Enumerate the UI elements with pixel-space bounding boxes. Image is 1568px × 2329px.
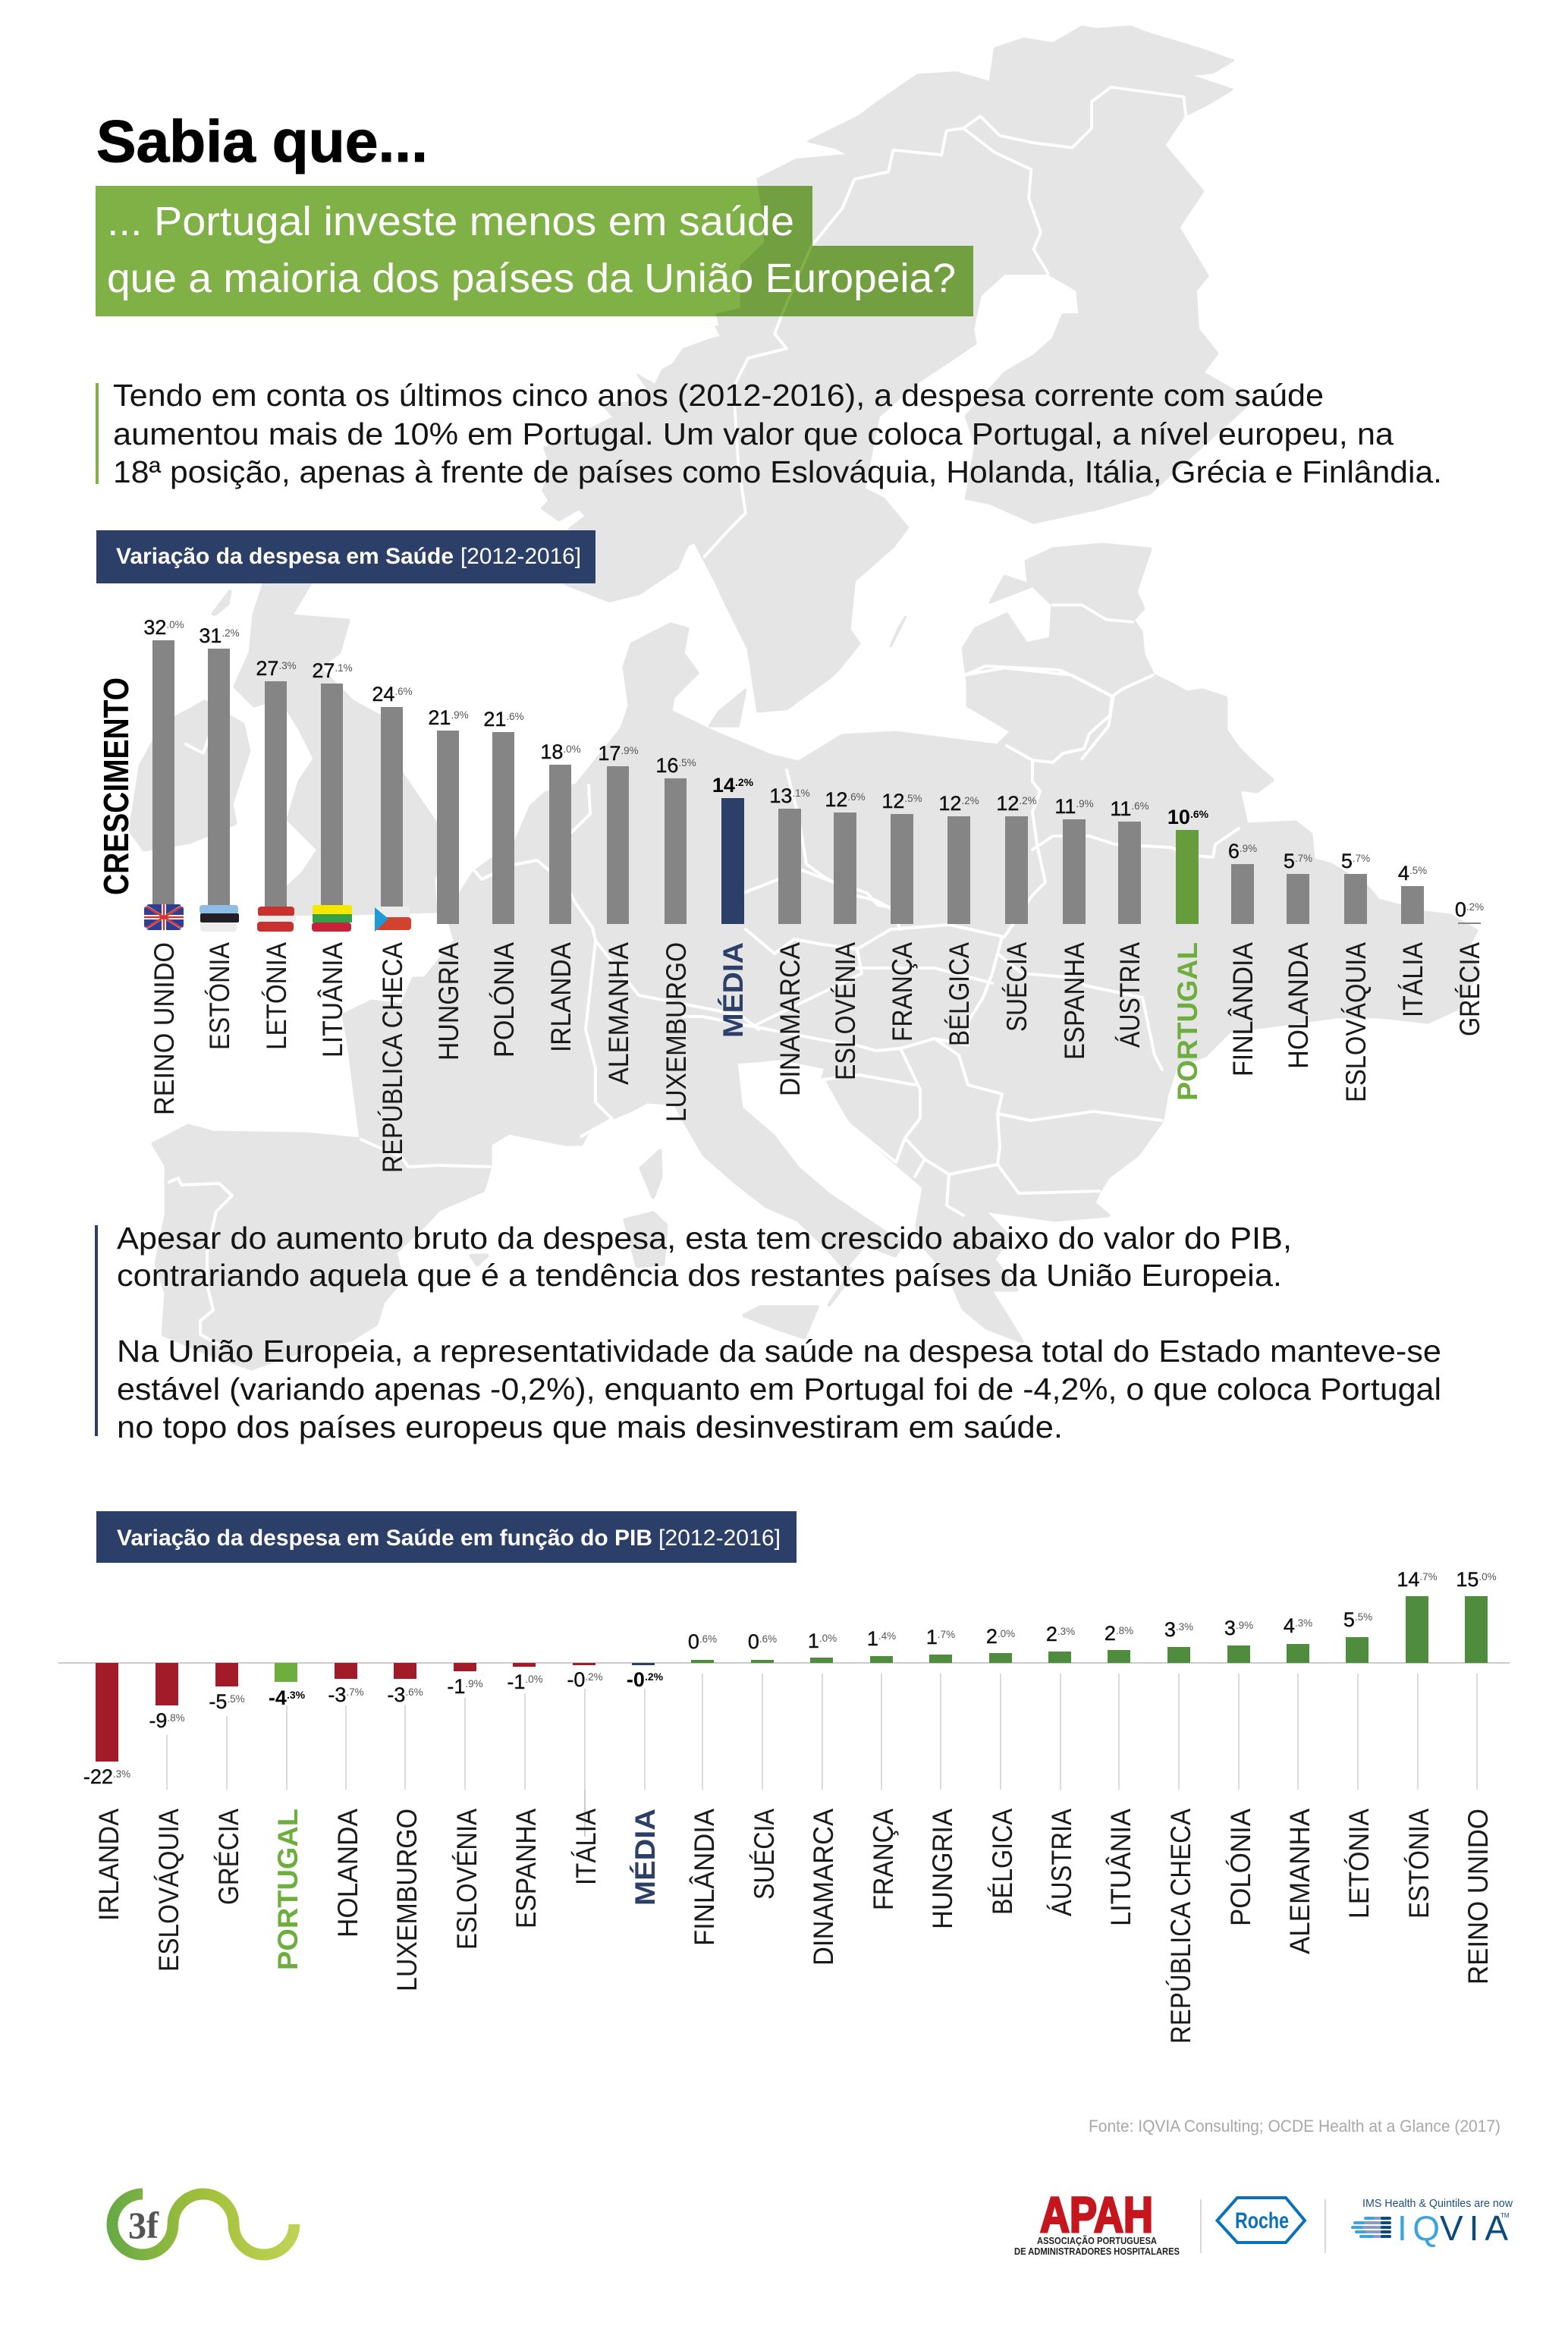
bar: Eslováquia: ESLOVÁQUIA	[1340, 942, 1372, 1102]
bar: Lituânia: .1%	[335, 662, 353, 674]
bar: Bélgica: 12	[938, 792, 961, 815]
intro text block: Tendo em conta os últimos cinco anos (2012-2016), a despesa corrente com saúde	[113, 378, 1324, 413]
bar: Reino Unido: 32	[143, 616, 166, 639]
bar: Espanha: .9%	[1076, 798, 1094, 809]
bar: Polónia	[483, 708, 524, 1058]
bar: França: 12	[881, 790, 904, 812]
logo: IQVIA: IMS Health & Quintiles are now	[1362, 2198, 1513, 2210]
bar: Reino Unido: .0%	[166, 619, 184, 630]
bar: República Checa: REPÚBLICA CHECA	[377, 942, 408, 1173]
bar: República Checa: 3	[1164, 1618, 1176, 1641]
bar: Espanha: ESPANHA	[511, 1809, 542, 1928]
bar: Eslovénia	[447, 1663, 483, 1950]
bar: França	[867, 1627, 899, 1910]
bar: Holanda: HOLANDA	[332, 1809, 363, 1938]
bar: Espanha: .0%	[525, 1674, 543, 1685]
bar: Eslovénia: ESLOVÉNIA	[830, 942, 861, 1080]
bar: Portugal: PORTUGAL	[272, 1809, 303, 1970]
bar: Eslovénia	[825, 788, 866, 1080]
bar: Dinamarca: 13	[769, 784, 792, 807]
flag: Letónia	[257, 907, 296, 932]
bar: Reino Unido: REINO UNIDO	[149, 942, 180, 1115]
bar: Itália: 4	[1398, 862, 1409, 885]
bar chart: variação da despesa	[143, 616, 1485, 1173]
flag: Reino Unido	[144, 904, 184, 930]
bar: República Checa: REPÚBLICA CHECA	[1165, 1809, 1196, 2044]
bar: Suécia: 12	[996, 792, 1019, 815]
bar: Áustria: .6%	[1131, 800, 1149, 812]
bar: Irlanda	[540, 740, 581, 1052]
bar chart: variação em função do PIB	[58, 1568, 1510, 2044]
bar: Itália: ITÁLIA	[1397, 942, 1428, 1017]
bar: Eslováquia: -9	[149, 1709, 167, 1732]
bar: Espanha: ESPANHA	[1059, 942, 1090, 1060]
bar: Espanha	[1054, 795, 1094, 1060]
bar: Dinamarca: DINAMARCA	[775, 942, 806, 1096]
logo: IQVIA: IQ	[1397, 2208, 1440, 2248]
bar: Hungria: .9%	[451, 709, 469, 721]
bar: Hungria: 21	[428, 706, 451, 729]
bar: Áustria: .3%	[1057, 1626, 1075, 1637]
bar: Finlândia: FINLÂNDIA	[1227, 942, 1258, 1076]
heading: chart 1: [2012-2016]	[460, 544, 581, 569]
bar: Itália	[1397, 862, 1428, 1017]
bar: Bélgica: 2	[986, 1625, 998, 1648]
text block: PIB commentary: contrariando aquela que é a tendência dos restantes países da União Europeia.	[117, 1258, 1282, 1293]
bar: Luxemburgo: -3	[387, 1683, 405, 1706]
logo: APAH	[1014, 2186, 1180, 2257]
bar: Alemanha: ALEMANHA	[1284, 1809, 1315, 1954]
bar: Polónia: POLÓNIA	[489, 942, 520, 1058]
bar: Suécia: SUÉCIA	[1001, 942, 1032, 1032]
subtitle green banner: que a maioria dos países da União Europeia?	[107, 256, 956, 301]
bar: Polónia	[1224, 1617, 1256, 1926]
bar: França: .4%	[878, 1630, 896, 1642]
bar: França: FRANÇA	[887, 942, 918, 1042]
bar: Eslovénia: .6%	[847, 791, 866, 803]
bar: Finlândia	[1227, 840, 1258, 1076]
bar: Itália: .5%	[1409, 865, 1427, 876]
bar: Reino Unido: .0%	[1478, 1571, 1497, 1583]
bar: Bélgica: .0%	[998, 1628, 1015, 1639]
bar: Média: 14	[712, 774, 735, 797]
bar: Luxemburgo: 16	[655, 754, 678, 777]
bar: França: .5%	[904, 793, 922, 804]
bar: Lituânia: LITUÂNIA	[317, 942, 348, 1058]
logo: 3f	[112, 2194, 294, 2255]
bar: Hungria	[926, 1626, 958, 1929]
bar: Luxemburgo: .5%	[678, 757, 696, 768]
logo: IQVIA: TM	[1500, 2212, 1510, 2219]
bar: Bélgica: BÉLGICA	[944, 942, 975, 1046]
logo: Roche: Roche	[1235, 2208, 1289, 2233]
bar: Hungria	[428, 706, 469, 1061]
bar: Portugal	[1167, 806, 1209, 1101]
bar: Letónia	[1343, 1608, 1375, 1919]
background map of Europe	[130, 27, 1478, 1369]
bar: Letónia: 5	[1343, 1608, 1355, 1631]
bar: Letónia: LETÓNIA	[1343, 1809, 1375, 1919]
bar: Itália: .2%	[585, 1671, 603, 1683]
bar: Espanha: -1	[507, 1671, 525, 1693]
bar: Hungria: .7%	[938, 1629, 955, 1640]
bar: Hungria: HUNGRIA	[433, 942, 464, 1061]
bar: Grécia	[209, 1663, 245, 1905]
bar: França: 1	[867, 1627, 878, 1650]
bar: Irlanda: .3%	[113, 1768, 130, 1780]
bar: Média	[627, 1663, 664, 1906]
bar: Finlândia: 6	[1228, 840, 1240, 863]
bar: Suécia	[996, 792, 1037, 1032]
bar: Eslováquia: .7%	[1353, 853, 1370, 864]
bar: Holanda: .7%	[346, 1686, 364, 1698]
bar: Áustria	[1046, 1623, 1077, 1916]
bar: Reino Unido: 15	[1456, 1568, 1478, 1591]
bar: Letónia: .5%	[1355, 1611, 1372, 1623]
bar: Alemanha: 17	[598, 742, 621, 765]
bar: Áustria: ÁUSTRIA	[1114, 942, 1145, 1048]
bar: Grécia: 0	[1455, 898, 1466, 921]
bar: Suécia: 0	[748, 1630, 759, 1653]
heading: chart 1	[96, 530, 595, 583]
bar: Bélgica: .2%	[961, 795, 979, 806]
bar: Lituânia: 27	[312, 659, 335, 682]
bar: República Checa: 24	[372, 683, 394, 706]
bar: Eslovénia: .9%	[465, 1678, 483, 1689]
bar: Lituânia	[312, 659, 353, 1058]
bar: Holanda: .7%	[1295, 853, 1312, 864]
axis title: crescimento: CRESCIMENTO	[96, 677, 136, 895]
bar: Eslovénia: -1	[447, 1675, 465, 1698]
bar: Dinamarca: .1%	[792, 787, 810, 799]
bar: Áustria: ÁUSTRIA	[1046, 1809, 1077, 1916]
bar: Dinamarca: 1	[808, 1630, 819, 1652]
bar: Hungria: 1	[926, 1626, 938, 1649]
subtitle green banner: ... Portugal investe menos em saúde	[107, 199, 794, 244]
bar: Alemanha: .3%	[1295, 1617, 1312, 1629]
bar: Irlanda: 18	[540, 740, 563, 763]
bar: Luxemburgo: .6%	[405, 1686, 423, 1698]
source note: Fonte: IQVIA Consulting; OCDE Health at a Glance (2017)	[1089, 2117, 1500, 2136]
bar: República Checa: .3%	[1176, 1621, 1193, 1633]
bar: Finlândia: 0	[688, 1630, 699, 1653]
bar: Luxemburgo: LUXEMBURGO	[391, 1809, 423, 1991]
bar: Itália: ITÁLIA	[570, 1809, 602, 1885]
bar: Espanha	[507, 1663, 543, 1928]
bar: Portugal: .3%	[287, 1689, 306, 1701]
bar: Portugal: 10	[1167, 806, 1190, 828]
bar: Alemanha	[1284, 1614, 1315, 1954]
bar: Dinamarca: .0%	[819, 1633, 837, 1644]
bar: Alemanha	[598, 742, 639, 1085]
logo: APAH: DE ADMINISTRADORES HOSPITALARES	[1014, 2246, 1180, 2257]
bar: França	[881, 790, 922, 1042]
bar: Irlanda: IRLANDA	[545, 942, 577, 1052]
bar: Irlanda: -22	[83, 1765, 113, 1788]
bar: Média: .2%	[735, 776, 754, 788]
bar: Portugal	[269, 1663, 306, 1970]
bar: Bélgica: BÉLGICA	[987, 1809, 1018, 1915]
logo: APAH: ASSOCIAÇÃO PORTUGUESA	[1037, 2235, 1158, 2246]
bar: Portugal: -4	[269, 1686, 287, 1709]
bar: Grécia: .2%	[1466, 901, 1484, 913]
bar: Grécia: GRÉCIA	[1454, 942, 1485, 1036]
bar: Holanda: HOLANDA	[1283, 942, 1314, 1069]
heading: chart 2: [2012-2016]	[658, 1526, 781, 1551]
flag: República Checa	[375, 907, 411, 932]
bar: Eslovénia: ESLOVÉNIA	[451, 1809, 482, 1950]
bar: Estónia: .2%	[222, 627, 240, 639]
bar: Reino Unido	[1456, 1568, 1497, 1985]
bar: Portugal: .6%	[1190, 808, 1209, 820]
bar: Eslováquia: ESLOVÁQUIA	[153, 1809, 184, 1972]
bar: Média: MÉDIA	[718, 942, 749, 1038]
bar: República Checa	[372, 683, 413, 1173]
bar: França: FRANÇA	[868, 1809, 899, 1910]
bar: Holanda	[328, 1663, 364, 1938]
bar: Portugal: PORTUGAL	[1172, 942, 1203, 1101]
intro text block: aumentou mais de 10% em Portugal. Um valor que coloca Portugal, a nível europeu, na	[113, 416, 1394, 451]
bar: Letónia: .3%	[278, 660, 297, 671]
bar: Holanda	[1283, 850, 1314, 1069]
bar: Estónia	[199, 624, 240, 1050]
bar: Holanda: -3	[328, 1683, 346, 1706]
intro text block: 18ª posição, apenas à frente de países como Eslováquia, Holanda, Itália, Grécia e Finlândia.	[113, 454, 1442, 489]
bar: Polónia: .6%	[506, 711, 524, 722]
bar: Média: .2%	[645, 1671, 664, 1683]
flag: Estónia	[200, 905, 239, 932]
bar: Hungria: HUNGRIA	[927, 1809, 958, 1929]
bar: Suécia	[748, 1630, 780, 1900]
bar: Áustria: 2	[1046, 1623, 1057, 1645]
bar: Dinamarca: DINAMARCA	[808, 1809, 839, 1966]
bar: Estónia	[1397, 1568, 1438, 1919]
bar: Finlândia: .6%	[699, 1633, 717, 1645]
intro text block	[96, 378, 1442, 489]
bar: Polónia: 21	[483, 708, 506, 731]
bar: Itália	[567, 1663, 603, 1885]
subtitle green banner	[96, 186, 973, 316]
bar: Grécia: GRÉCIA	[213, 1809, 244, 1905]
bar: Polónia: POLÓNIA	[1225, 1809, 1256, 1926]
bar: Reino Unido: REINO UNIDO	[1463, 1809, 1494, 1985]
bar: Estónia: 31	[199, 624, 222, 647]
flag: Lituânia	[312, 905, 352, 932]
bar: Luxemburgo	[655, 754, 696, 1122]
bar: Estónia: ESTÓNIA	[204, 942, 235, 1050]
heading: chart 1: Variação da despesa em Saúde	[116, 544, 454, 569]
bar: Grécia: .5%	[227, 1693, 245, 1705]
bar: Irlanda	[83, 1663, 130, 1921]
bar: Holanda: 5	[1284, 850, 1295, 872]
bar: Média	[712, 774, 754, 1038]
bar: Média: MÉDIA	[630, 1809, 661, 1906]
heading: chart 2	[96, 1511, 797, 1563]
bar: Dinamarca	[808, 1630, 839, 1966]
bar: Áustria	[1110, 797, 1149, 1048]
bar: Luxemburgo	[387, 1663, 423, 1991]
bar: Média: -0	[627, 1668, 645, 1691]
bar: Estónia: 14	[1397, 1568, 1419, 1591]
bar: Suécia: .2%	[1019, 795, 1037, 806]
bar: Letónia: LETÓNIA	[261, 942, 292, 1050]
text block: PIB commentary: estável (variando apenas -0,2%), enquanto em Portugal foi de -4,2%, o que coloca Portugal	[117, 1372, 1441, 1407]
bar: Eslováquia	[149, 1663, 185, 1972]
bar: Espanha: 11	[1054, 795, 1076, 818]
text block: PIB commentary	[95, 1221, 1441, 1444]
bar: Bélgica	[938, 792, 979, 1046]
bar: Irlanda: IRLANDA	[93, 1809, 124, 1921]
bar: Lituânia: .8%	[1116, 1625, 1133, 1636]
bar: Bélgica	[986, 1625, 1018, 1915]
bar: Áustria: 11	[1110, 797, 1131, 820]
bar: Alemanha: .9%	[621, 745, 639, 756]
bar: República Checa	[1164, 1618, 1196, 2044]
bar: Eslováquia: .8%	[167, 1712, 185, 1724]
bar: Lituânia: 2	[1105, 1622, 1116, 1645]
bar: Lituânia: LITUÂNIA	[1105, 1809, 1136, 1926]
bar: Letónia: 27	[256, 657, 278, 680]
bar: Estónia: .7%	[1419, 1571, 1438, 1583]
bar: Alemanha: 4	[1284, 1614, 1295, 1637]
bar: Polónia: .9%	[1236, 1620, 1253, 1631]
title: Sabia que...	[96, 108, 428, 174]
bar: Lituânia	[1105, 1622, 1136, 1926]
bar: Suécia: SUÉCIA	[749, 1809, 780, 1900]
text block: PIB commentary: Na União Europeia, a representatividade da saúde na despesa total do Estado manteve-se	[117, 1334, 1441, 1369]
heading: chart 2: Variação da despesa em Saúde em função do PIB	[117, 1526, 652, 1551]
bar: Finlândia: FINLÂNDIA	[689, 1809, 720, 1946]
bar: Polónia: 3	[1224, 1617, 1236, 1639]
bar: Reino Unido	[143, 616, 184, 1115]
country borders on the map	[169, 87, 1239, 1345]
bar: Eslovénia: 12	[825, 788, 847, 811]
bar: Irlanda: .0%	[563, 743, 581, 755]
bar: Estónia: ESTÓNIA	[1403, 1809, 1434, 1919]
text block: PIB commentary: Apesar do aumento bruto da despesa, esta tem crescido abaixo do valor do PIB,	[117, 1221, 1292, 1256]
bar: Finlândia: .9%	[1240, 843, 1257, 854]
bar: Alemanha: ALEMANHA	[603, 942, 634, 1085]
logo: IQVIA	[1353, 2198, 1513, 2248]
bar: Letónia	[256, 657, 297, 1050]
bar: Finlândia	[688, 1630, 720, 1946]
bar: Luxemburgo: LUXEMBURGO	[661, 942, 692, 1122]
logo: Roche	[1217, 2198, 1305, 2243]
logo: IQVIA: VIA	[1440, 2208, 1508, 2248]
bar: República Checa: .6%	[394, 686, 413, 697]
text block: PIB commentary: no topo dos países europeus que mais desinvestiram em saúde.	[117, 1410, 1063, 1444]
bar: Grécia: -5	[209, 1690, 227, 1713]
logo: APAH: APAH	[1040, 2186, 1153, 2243]
logo: 3f: 3f	[128, 2204, 159, 2246]
bar: Eslováquia: 5	[1341, 850, 1353, 872]
bar: Itália: -0	[567, 1668, 585, 1691]
bar: Dinamarca	[769, 784, 810, 1096]
bar: Suécia: .6%	[759, 1633, 777, 1645]
